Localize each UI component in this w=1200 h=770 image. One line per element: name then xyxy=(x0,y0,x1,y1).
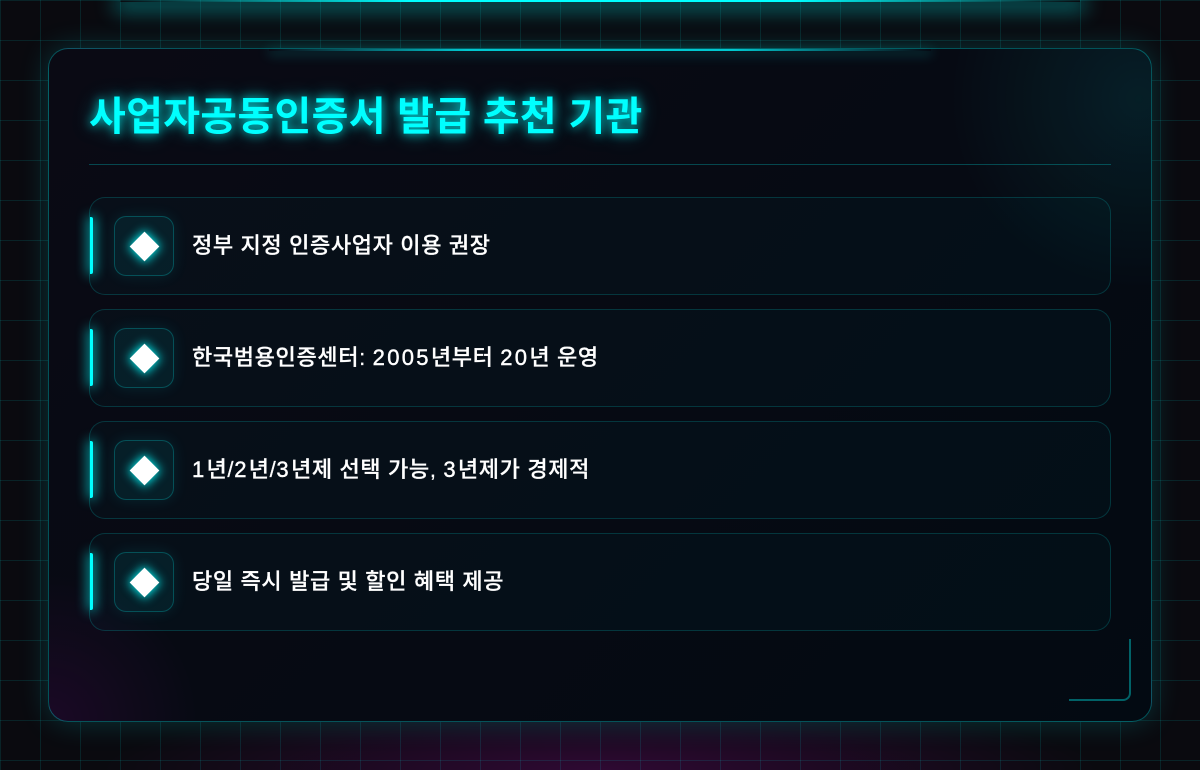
icon: diamond 1 xyxy=(114,216,174,276)
text: item 4: 당일 즉시 발급 및 할인 혜택 제공 xyxy=(192,569,504,594)
list item 4 xyxy=(89,533,1111,631)
icon: diamond 4 xyxy=(114,552,174,612)
text: item 3: 1년/2년/3년제 선택 가능, 3년제가 경제적 xyxy=(192,457,590,482)
list item 2 xyxy=(89,309,1111,407)
icon: diamond 3 xyxy=(114,440,174,500)
title: 사업자공동인증서 발급 추천 기관 xyxy=(89,95,643,139)
corner bracket xyxy=(1069,639,1131,701)
icon: diamond 2 xyxy=(114,328,174,388)
list item 3 xyxy=(89,421,1111,519)
text: item 2: 한국범용인증센터: 2005년부터 20년 운영 xyxy=(192,345,599,370)
list item 1 xyxy=(89,197,1111,295)
text: item 1: 정부 지정 인증사업자 이용 권장 xyxy=(192,233,491,258)
top glowing bar xyxy=(120,0,1080,2)
